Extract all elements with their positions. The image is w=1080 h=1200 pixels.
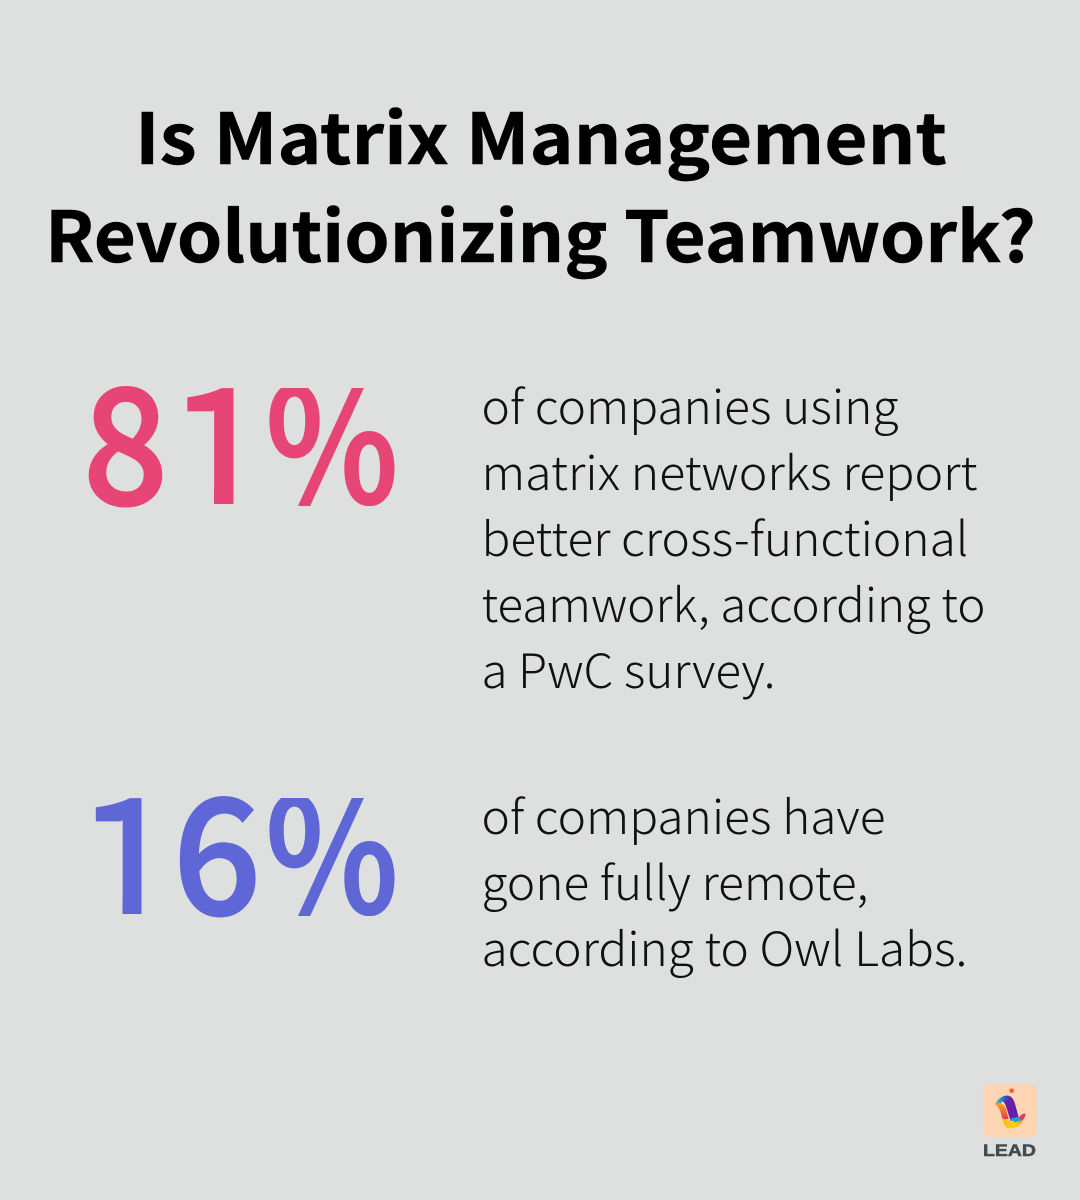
- logo: LEAD: [983, 1084, 1037, 1160]
- icon: bird mark: [995, 1088, 1026, 1128]
- stat: 81%: [88, 386, 394, 508]
- icon: logo background: [983, 1084, 1037, 1137]
- title: [45, 84, 1036, 283]
- stat: 16%: 6: [173, 729, 261, 961]
- text block: 81% description: better cross-functional: [482, 501, 968, 570]
- stat: 16%: %: [265, 729, 399, 961]
- stat: 81%: 8: [83, 319, 168, 551]
- text block: 16% description: of companies have: [482, 779, 886, 848]
- title: Is Matrix Management: [135, 84, 947, 185]
- text block: 81% description: a PwC survey.: [482, 633, 776, 702]
- stat: 16%: [96, 796, 394, 918]
- text block: 16% description: according to Owl Labs.: [482, 911, 968, 980]
- text block: 81% description: [482, 369, 986, 702]
- text block: 16% description: gone fully remote,: [482, 845, 868, 914]
- stat: 81%: 1: [166, 319, 282, 551]
- text block: 81% description: matrix networks report: [482, 435, 978, 504]
- text block: 16% description: [482, 779, 968, 980]
- stat: 16%: 1: [74, 729, 190, 961]
- stat: 81%: %: [265, 319, 399, 551]
- text block: 81% description: teamwork, according to: [482, 567, 986, 636]
- text block: 81% description: of companies using: [482, 369, 898, 438]
- title: Revolutionizing Teamwork?: [45, 182, 1036, 283]
- logo wordmark: LEAD: [983, 1141, 1036, 1160]
